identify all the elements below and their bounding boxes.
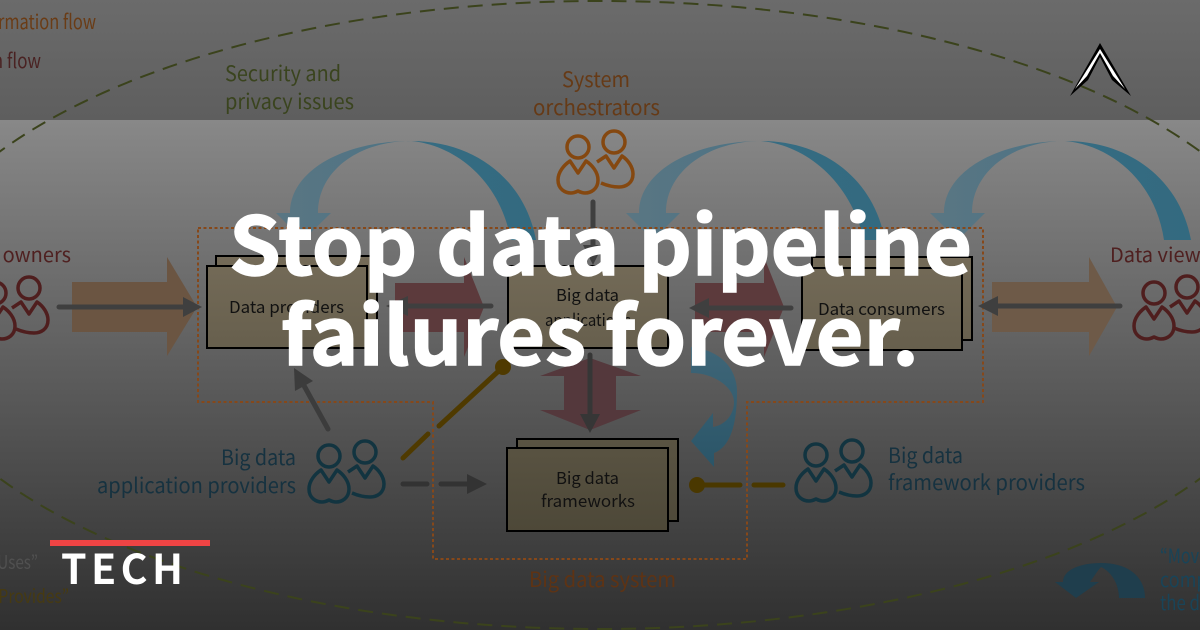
people icon: framework providers xyxy=(796,440,871,501)
arrow: consumers to applications xyxy=(689,298,791,318)
box: data consumers: Data consumers xyxy=(818,296,945,320)
box: big data frameworks: frameworks xyxy=(541,488,635,512)
connector: framework providers to frameworks xyxy=(689,477,783,493)
arrow: application providers up to data providers xyxy=(294,368,328,429)
connector: application providers to applications xyxy=(403,359,511,458)
label: security and privacy issues: Security and xyxy=(225,58,341,88)
box: big data applications: Big data xyxy=(556,282,619,306)
arrow: tan consumers to viewers xyxy=(992,257,1117,356)
arrow: red providers to applications xyxy=(395,257,484,357)
title: Stop data pipeline xyxy=(229,183,972,299)
label: big data application providers: application providers xyxy=(97,470,296,500)
box: data providers: Data providers xyxy=(229,294,344,318)
arrow: application providers to frameworks xyxy=(403,474,487,494)
background: top strip xyxy=(0,0,1200,120)
legend: moves computation text xyxy=(1160,540,1200,616)
arrow: tan data owners to providers xyxy=(72,257,197,356)
box: big data frameworks xyxy=(507,439,678,531)
arrow: red double vertical xyxy=(540,358,641,430)
logo: chevron mark xyxy=(1070,43,1131,96)
people icon: system orchestrators xyxy=(558,131,633,193)
label: system orchestrators: orchestrators xyxy=(533,92,660,122)
box: data consumers xyxy=(802,257,972,350)
category tag: tech: TECH xyxy=(61,536,183,596)
people icon: data owners xyxy=(0,277,48,339)
label: system orchestrators xyxy=(533,64,660,122)
label: security and privacy issues: privacy issues xyxy=(225,86,354,116)
curved arrow: blue loop 2 xyxy=(626,141,885,240)
label: big data system: Big data system xyxy=(529,564,676,594)
box: big data frameworks: Big data xyxy=(556,465,619,489)
box: big data applications xyxy=(508,266,668,348)
box: big data applications: applications xyxy=(545,307,631,331)
arrow: data viewers to consumers xyxy=(978,296,1120,316)
arrow: data owners to data providers xyxy=(59,297,202,317)
box: data providers xyxy=(207,256,377,348)
label: system orchestrators: System xyxy=(562,64,630,94)
arrow: applications down to frameworks xyxy=(580,355,600,433)
label: big data framework providers: framework providers xyxy=(888,467,1085,497)
arrow: red applications to consumers xyxy=(695,257,784,357)
label: big data framework providers xyxy=(888,440,1085,497)
curved arrow: blue s-shape to frameworks xyxy=(691,347,737,467)
arrow: applications to data providers xyxy=(386,296,491,316)
label: big data framework providers: Big data xyxy=(888,440,963,470)
label: security and privacy issues xyxy=(225,58,354,116)
legend: uses and provides xyxy=(0,548,69,609)
label: big data application providers xyxy=(97,442,296,500)
people icon: application providers xyxy=(309,441,384,502)
big data system dotted boundary xyxy=(198,228,983,559)
curved arrow: blue loop 3 xyxy=(930,141,1191,240)
people icon: data viewers xyxy=(1134,276,1200,339)
title xyxy=(229,183,972,389)
curved arrow: blue loop 1 xyxy=(276,141,536,240)
label: big data application providers: Big data xyxy=(221,442,296,472)
legend: small curved arrow xyxy=(1055,563,1145,598)
legend: flow labels xyxy=(0,6,96,74)
title: failures forever. xyxy=(281,273,919,389)
arrow: orchestrators down to applications xyxy=(583,202,603,265)
